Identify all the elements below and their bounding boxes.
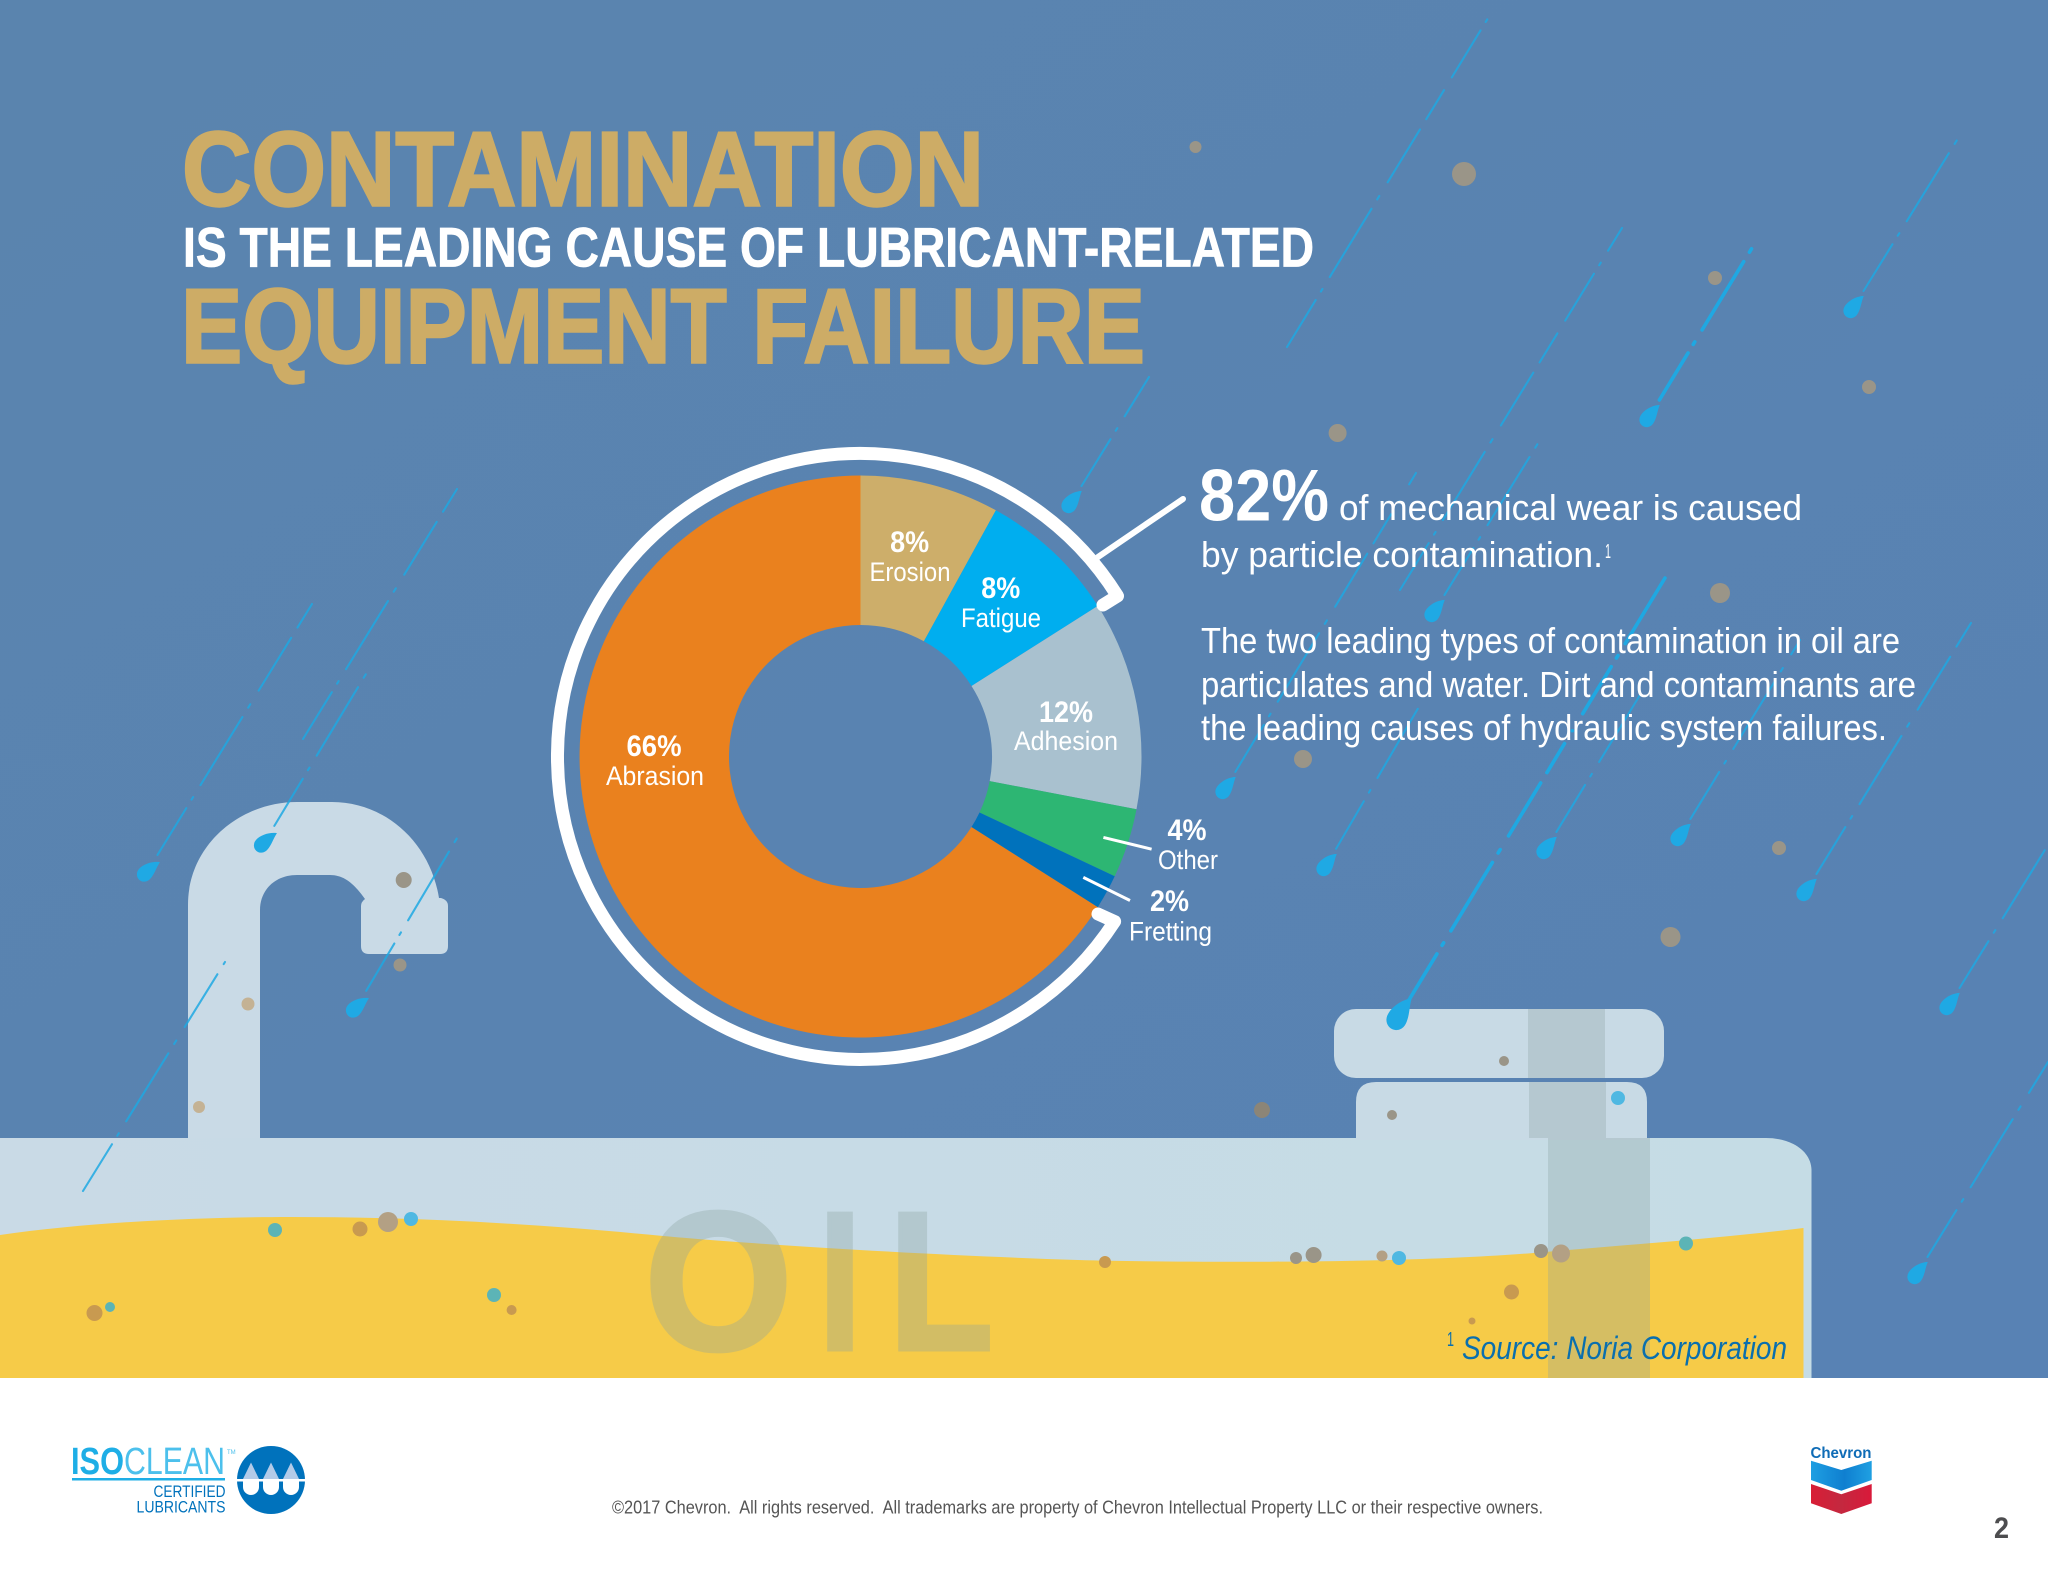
label: Fatigue: Fatigue (961, 603, 1041, 633)
OIL label on tank (645, 1172, 993, 1391)
label: Erosion (870, 526, 950, 587)
slice: Adhesion 12% (972, 606, 1142, 809)
82% bracket ring (557, 453, 1118, 1059)
Chevron wordmark: Chevron (1810, 1445, 1872, 1462)
text block: leading contamination types: the leading causes of hydraulic system failures. (1201, 707, 1887, 748)
OIL label on tank: O (645, 1172, 792, 1391)
illustration: faucet pipe (188, 802, 448, 1140)
label: Adhesion (1014, 696, 1118, 756)
text block: leading contamination types: particulates and water. Dirt and contaminants are (1201, 664, 1916, 705)
footer band (0, 1378, 2048, 1582)
tank cap top (1334, 1009, 1664, 1078)
slice: Abrasion 66% (580, 476, 1098, 1038)
rain drop with streak below nozzle (343, 828, 463, 1021)
donut chart: causes of mechanical wear (557, 453, 1218, 1059)
text block: 82% statistic (1199, 456, 1802, 575)
tank neck (1356, 1082, 1647, 1140)
OIL label on tank: L (889, 1172, 993, 1391)
logo: ISOCLEAN certified lubricants: CLEAN (124, 1441, 225, 1483)
label: Abrasion: 66% (626, 730, 682, 763)
rain streak long (1400, 228, 1622, 590)
label: Adhesion: Adhesion (1014, 726, 1118, 756)
contaminant particles (86, 141, 1876, 1324)
label: Abrasion: Abrasion (606, 761, 704, 791)
label: Fretting (1129, 885, 1212, 946)
title (181, 110, 1314, 386)
label: Adhesion: 12% (1039, 696, 1093, 729)
OIL label on tank: I (819, 1172, 861, 1391)
label: Fretting: Fretting (1129, 916, 1212, 946)
title line 2: IS THE LEADING CAUSE OF LUBRICANT-RELATED (183, 216, 1314, 278)
page number: 2 (1994, 1512, 2009, 1545)
slice: Erosion 8% (860, 476, 996, 641)
label: Fatigue: 8% (981, 572, 1020, 605)
copyright line: ©2017 Chevron. All rights reserved. All trademarks are property of Chevron Intellectual Property LLC or their respective owners. (612, 1498, 1543, 1518)
blue chevron (1811, 1461, 1872, 1491)
tank shaded strip (1528, 1009, 1650, 1380)
source footnote: 1 (1447, 1329, 1454, 1351)
logo badge (237, 1446, 305, 1514)
rain drop with streak (1313, 705, 1420, 879)
tank body (0, 1138, 1812, 1380)
logo: ISOCLEAN certified lubricants: TM (227, 1450, 236, 1456)
rain drop with streak (1533, 695, 1640, 862)
rain drop with streak (1212, 473, 1416, 802)
label: Abrasion (606, 730, 704, 791)
rain drop with streak (1904, 1062, 2048, 1287)
rain drop with streak (1421, 440, 1540, 625)
leader line: Fretting (1083, 877, 1130, 900)
rain streak (303, 489, 457, 739)
rain streaks and drops (83, 10, 2048, 1287)
source footnote: Source: Noria Corporation (1462, 1330, 1787, 1366)
label: Fatigue (961, 572, 1041, 633)
label: Fretting: 2% (1150, 885, 1189, 918)
logo sub-text: CERTIFIED (154, 1483, 226, 1501)
footnote marker: 1 (1605, 541, 1611, 563)
slice: Fretting 2% (972, 812, 1115, 907)
rain drop with streak (1936, 845, 2048, 1018)
oil level (0, 1217, 1804, 1380)
title line 3: EQUIPMENT FAILURE (181, 268, 1145, 386)
big number: 82% (1199, 456, 1329, 536)
rain drop with streak (1667, 640, 1800, 849)
large rain drop with streak (1383, 578, 1665, 1033)
statistic line 2: by particle contamination. (1201, 534, 1603, 575)
label: Other: 4% (1168, 814, 1206, 847)
rain drop with streak (1840, 132, 1962, 321)
label: Other: Other (1158, 845, 1218, 875)
text block: leading contamination types: The two leading types of contamination in oil are (1201, 620, 1900, 661)
logo wordmark: ISO (71, 1441, 124, 1483)
red chevron (1811, 1484, 1872, 1514)
rain streak (1287, 10, 1493, 347)
illustration: oil tank (0, 1009, 1812, 1391)
rain streak over tank (83, 962, 225, 1191)
rain drop with streak over faucet (251, 664, 372, 856)
text block: leading contamination types (1201, 620, 1916, 748)
logo: ISOCLEAN certified lubricants: LUBRICANTS (136, 1498, 226, 1516)
logo underline (72, 1478, 225, 1480)
label: Erosion: Erosion (870, 557, 950, 587)
label: Erosion: 8% (890, 526, 929, 559)
leader line: Other (1103, 837, 1152, 849)
callout line to 82% text (1098, 499, 1183, 557)
slice: Fatigue 8% (924, 510, 1098, 686)
statistic line 1: of mechanical wear is caused (1339, 487, 1802, 528)
slice: Other 4% (980, 781, 1136, 876)
logo: Chevron (1810, 1445, 1872, 1514)
label: Other (1158, 814, 1218, 875)
rain drop with streak (1636, 248, 1752, 430)
rain drop with streak (1793, 623, 1971, 904)
logo: ISOCLEAN certified lubricants (71, 1441, 305, 1516)
rain drop with streak (134, 604, 312, 885)
rain drop with streak (1058, 377, 1149, 516)
title line 1: CONTAMINATION (182, 110, 984, 228)
